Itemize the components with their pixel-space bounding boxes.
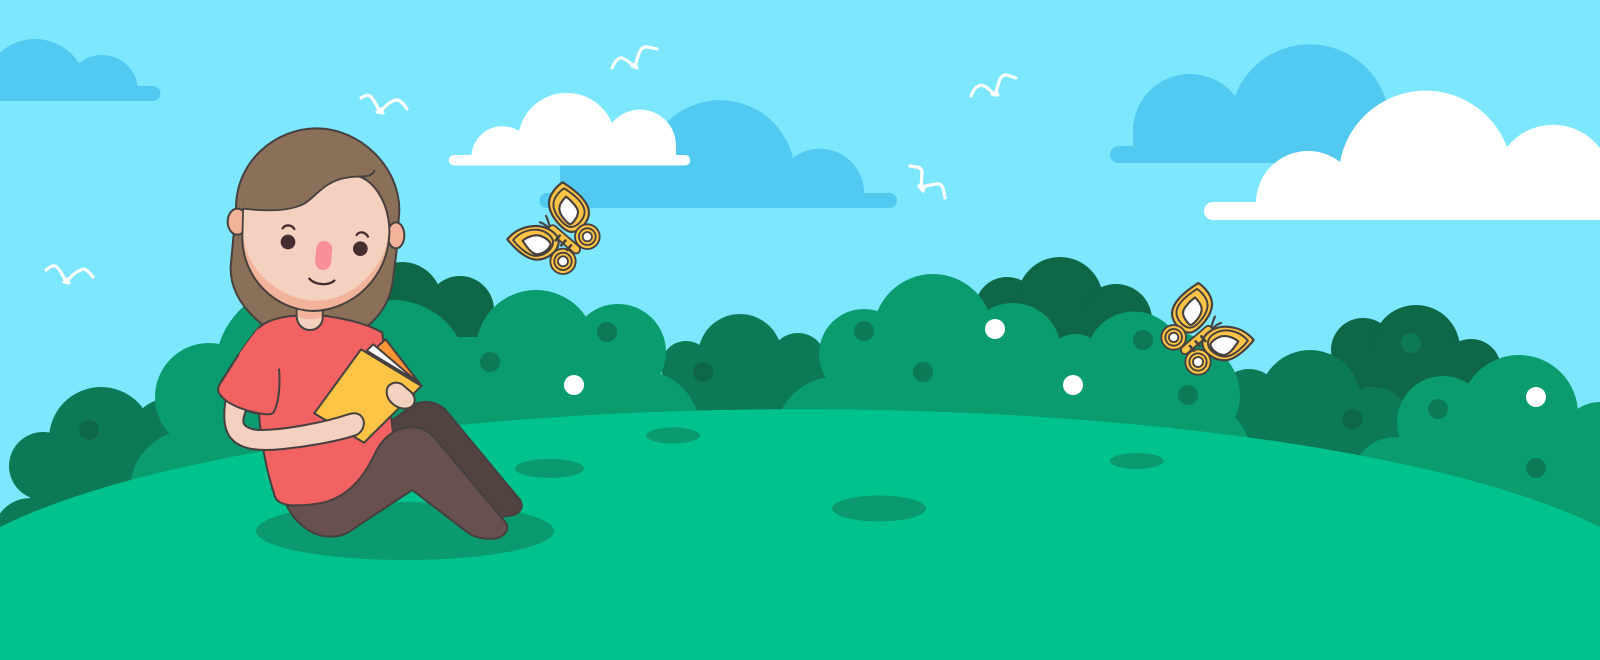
face: [242, 177, 389, 311]
antennae: [540, 216, 549, 227]
bird 4: [971, 75, 1016, 96]
sleeve line: [218, 355, 280, 414]
ear right: [388, 222, 404, 248]
body stripes: [556, 236, 571, 250]
eyebrows: [283, 225, 368, 237]
birds: [46, 47, 1016, 283]
antennae: [1212, 317, 1221, 328]
neck: [297, 307, 323, 330]
shirt: [218, 316, 393, 505]
neck shade: [298, 311, 322, 319]
nose: [314, 240, 333, 271]
bird 5: [910, 166, 945, 198]
bottom hind wing: [1185, 349, 1211, 375]
mouth: [309, 279, 334, 284]
body: [1185, 330, 1208, 350]
bushes: medium middle row: [0, 314, 1420, 560]
hill: [0, 409, 1600, 660]
sleeve: [218, 328, 280, 414]
ground patches and shadow: [256, 428, 1164, 560]
butterfly right: [1161, 283, 1254, 375]
hand: [387, 383, 415, 409]
forelock: [360, 171, 374, 177]
book back cover: [377, 339, 422, 386]
bird 1: [612, 47, 657, 68]
bushes: dark back row: [362, 257, 1501, 450]
cloud: white centre: [449, 93, 690, 166]
bushes: front row: [130, 274, 1600, 560]
girl: [218, 128, 522, 539]
eyes: [281, 235, 368, 256]
bird 3: [46, 266, 93, 283]
face highlight: [243, 178, 388, 301]
dot on dark bush: [1401, 333, 1421, 353]
cloud: blue top right: [1110, 44, 1390, 163]
dots on medium bushes: [79, 362, 1362, 440]
book front cover: [314, 349, 421, 443]
body stripes: [1190, 336, 1205, 351]
body: [553, 229, 576, 249]
cloud: blue top left: [0, 39, 161, 101]
book pages: [367, 344, 416, 381]
butterfly left: [507, 182, 600, 274]
upper wing: [1172, 283, 1212, 333]
book: [314, 339, 422, 443]
lower-left wing: [507, 226, 559, 260]
dots on front bushes: [480, 321, 1546, 478]
lower wing: [1202, 327, 1254, 360]
cloud: white right: [1204, 91, 1600, 220]
right hind wing: [575, 224, 600, 249]
ear left: [228, 209, 247, 235]
back leg: [390, 402, 522, 517]
arm: [224, 393, 364, 450]
upper wing: [549, 182, 589, 232]
hair: [231, 128, 399, 327]
white flowers on bushes: [564, 319, 1546, 407]
bird 2: [361, 95, 407, 113]
left hind wing: [1161, 325, 1186, 350]
bottom hind wing: [550, 249, 576, 274]
cloud: blue centre: [540, 100, 897, 208]
front leg: [287, 427, 507, 539]
